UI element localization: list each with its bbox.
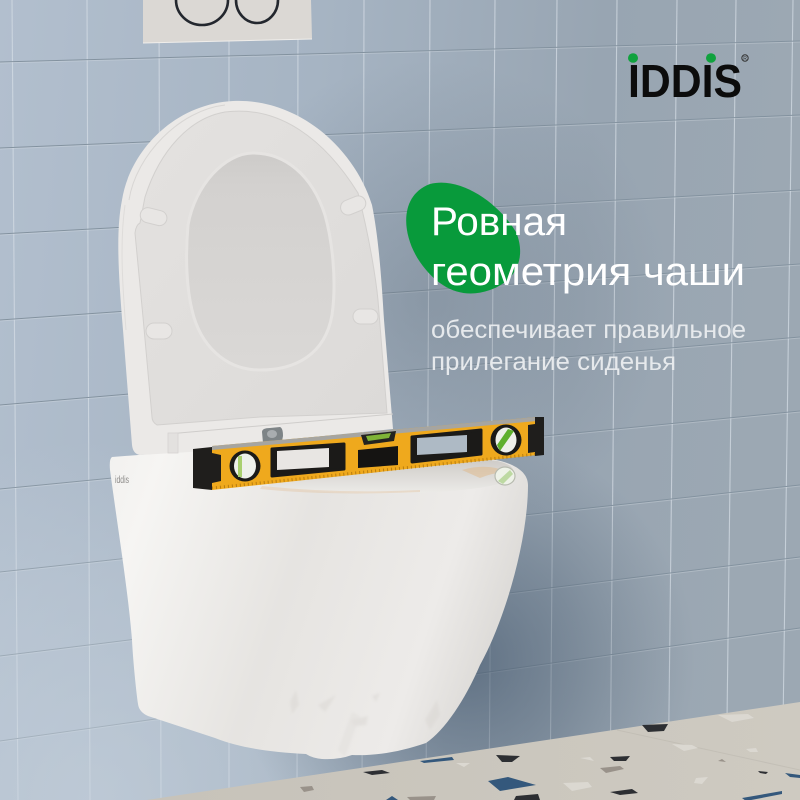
wall-hung toilet bowl bbox=[110, 451, 528, 759]
subheading bbox=[431, 316, 746, 376]
bowl logo: iddis bbox=[115, 475, 129, 486]
centre black block bbox=[358, 446, 398, 468]
right window bbox=[412, 430, 481, 462]
toilet seat lid bbox=[118, 101, 393, 455]
right end cap bbox=[528, 417, 544, 456]
heading: Ровная bbox=[431, 200, 567, 244]
left window bbox=[272, 444, 344, 476]
heading bbox=[431, 200, 745, 294]
terrazzo floor bbox=[0, 702, 800, 800]
subheading: прилегание сиденья bbox=[431, 348, 676, 376]
spirit level bbox=[193, 417, 544, 490]
IDDIS logo: IDDIS bbox=[628, 55, 742, 107]
seat inner panel bbox=[135, 111, 387, 425]
IDDIS logo: R bbox=[743, 56, 747, 62]
left end cap bbox=[193, 447, 221, 490]
bowl basin bbox=[250, 460, 515, 493]
left vial window bbox=[230, 450, 260, 482]
flush plate bbox=[143, 0, 312, 43]
green accent blob bbox=[406, 183, 520, 294]
seat bumpers bbox=[139, 194, 378, 339]
subheading: обеспечивает правильное bbox=[431, 316, 746, 344]
seat hinge strip bbox=[168, 414, 393, 453]
top bubble vial bbox=[361, 431, 396, 445]
heading: геометрия чаши bbox=[431, 250, 745, 294]
seat opening bbox=[187, 153, 334, 370]
bowl surface marks bbox=[290, 690, 440, 757]
right vial window bbox=[490, 424, 522, 456]
